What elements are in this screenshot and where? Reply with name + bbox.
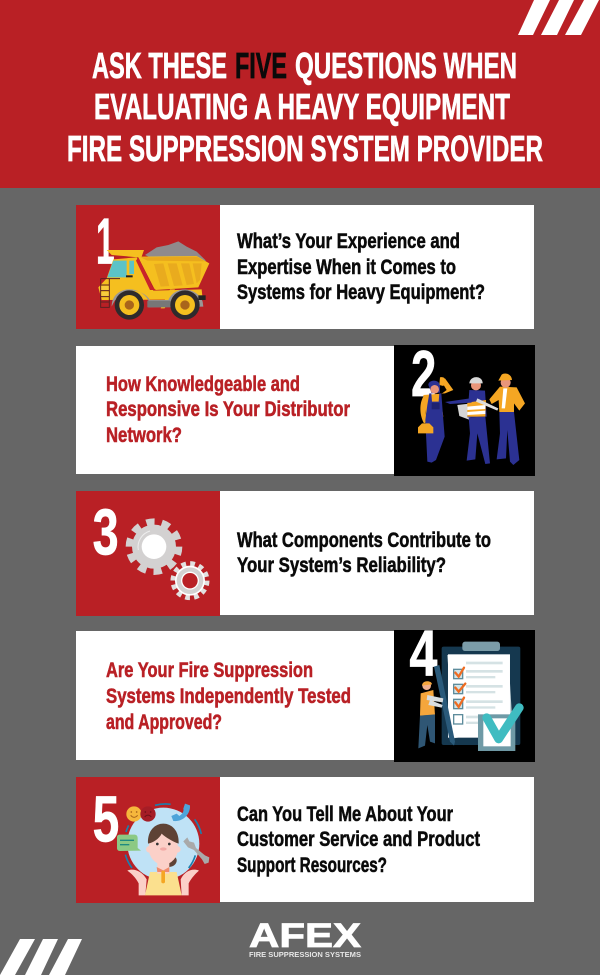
question 4 text: Systems Independently Tested bbox=[106, 685, 351, 708]
question 2 text: How Knowledgeable and bbox=[106, 373, 300, 396]
icon: number 1 and dump truck: 1 bbox=[96, 204, 115, 277]
question 1 text: Expertise When it Comes to bbox=[237, 256, 456, 279]
icon: number 5 and support agent: 5 bbox=[93, 782, 119, 855]
AFEX logo: AFEX bbox=[249, 917, 361, 955]
worker right bbox=[489, 374, 525, 465]
panel 4: testing and approval bbox=[76, 617, 535, 762]
question 1 text: Systems for Heavy Equipment? bbox=[237, 281, 485, 304]
large gear bbox=[130, 523, 178, 571]
panel 2: distributor network bbox=[76, 337, 535, 476]
icon: number 5 and support agent bbox=[93, 782, 209, 895]
AFEX logo: FIRE SUPPRESSION SYSTEMS bbox=[249, 950, 361, 959]
agent in circle bbox=[125, 804, 201, 895]
question 5 text: Can You Tell Me About Your bbox=[237, 803, 453, 826]
sad face bbox=[140, 806, 156, 822]
chat bubble bbox=[117, 835, 141, 851]
question 3 text: Your System’s Reliability? bbox=[237, 554, 446, 577]
header banner bbox=[0, 0, 600, 188]
worker left bbox=[418, 377, 453, 463]
question 1 text bbox=[237, 230, 485, 304]
question 5 text: Customer Service and Product bbox=[237, 828, 480, 851]
small gear bbox=[173, 564, 207, 597]
icon: number 3 and gears bbox=[93, 495, 207, 597]
question 4 text bbox=[106, 659, 351, 734]
title: FIVE bbox=[235, 45, 287, 86]
title bbox=[67, 45, 543, 169]
wrench bbox=[183, 837, 209, 864]
icon: number 2 and workers bbox=[411, 337, 525, 465]
question 2 text: Network? bbox=[106, 424, 182, 447]
question 1 text: What’s Your Experience and bbox=[237, 230, 460, 253]
worker middle bbox=[445, 377, 498, 464]
phone bbox=[171, 804, 190, 821]
question 2 text: Responsive Is Your Distributor bbox=[106, 398, 350, 421]
question 4 text: Are Your Fire Suppression bbox=[106, 659, 313, 682]
icon: number 3 and gears: 3 bbox=[93, 495, 119, 568]
smiley bbox=[126, 806, 142, 822]
panel 1: experience bbox=[76, 204, 534, 329]
question 3 text bbox=[237, 529, 491, 577]
teal check box bbox=[478, 708, 519, 751]
top-right stripes bbox=[518, 0, 599, 35]
icon: number 4 and checklist: 4 bbox=[409, 617, 437, 690]
bottom-left stripes bbox=[0, 939, 82, 975]
icon: number 2 and workers: 2 bbox=[411, 337, 436, 410]
question 5 text bbox=[237, 803, 480, 877]
icon: number 1 and dump truck bbox=[96, 204, 209, 320]
panel 5: customer service bbox=[76, 777, 534, 903]
question 3 text: What Components Contribute to bbox=[237, 529, 491, 552]
question 2 text bbox=[106, 373, 350, 447]
panel 3: reliability bbox=[76, 491, 534, 616]
question 5 text: Support Resources? bbox=[237, 854, 387, 877]
icon: number 4 and checklist bbox=[409, 617, 520, 751]
clipboard bbox=[442, 642, 520, 745]
question 4 text: and Approved? bbox=[106, 711, 222, 734]
worker with pencil bbox=[418, 665, 455, 748]
title: ASK THESE bbox=[92, 45, 227, 86]
